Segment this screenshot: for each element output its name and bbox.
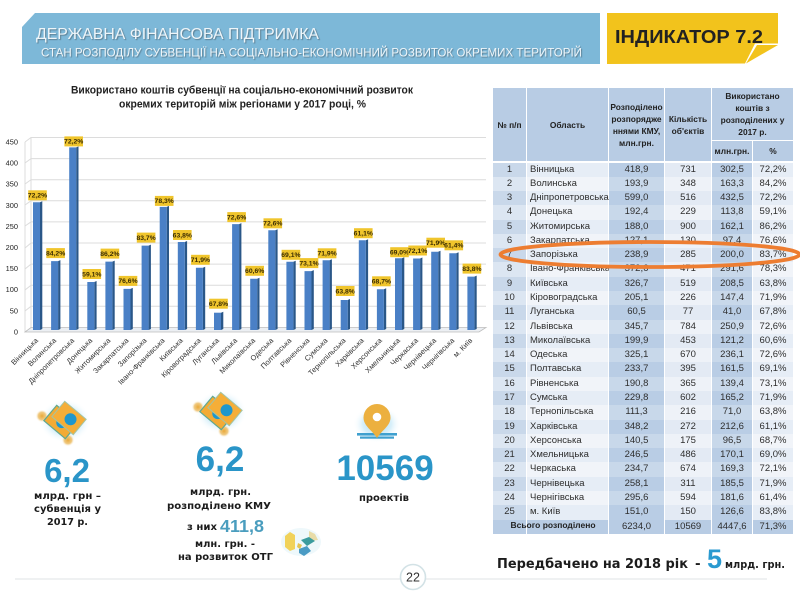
- table rows: 7: [507, 249, 512, 260]
- table rows: 69,1%: [760, 363, 786, 374]
- forecast 2018: млрд. грн.: [725, 559, 785, 571]
- table rows: 418,9: [625, 164, 648, 174]
- table rows: 162,1: [720, 221, 744, 232]
- table rows: 60,5: [627, 306, 646, 317]
- value labels: 72,6%: [263, 221, 282, 228]
- category labels: Одеська: [248, 335, 276, 363]
- table rows: 208,5: [720, 278, 744, 289]
- value labels: 84,2%: [46, 250, 65, 257]
- table rows: Чернівецька: [530, 478, 585, 489]
- chart title: окремих територій між регіонами у 2017 році, %: [119, 98, 366, 110]
- table rows: 72,2%: [760, 192, 786, 203]
- table rows: 24: [504, 492, 515, 503]
- forecast 2018: Передбачено на 2018 рік: [497, 556, 688, 572]
- table rows: 69,0%: [760, 449, 786, 460]
- table rows: 325,1: [625, 349, 648, 360]
- table rows: 311: [680, 478, 696, 489]
- table rows: 67,8%: [760, 306, 786, 317]
- table rows: Львівська: [530, 321, 573, 332]
- table rows: 72,1%: [760, 463, 786, 474]
- table rows: 258,1: [625, 478, 648, 489]
- value labels: 69,1%: [281, 252, 301, 259]
- table rows: 16: [504, 378, 515, 389]
- category labels: Рівненська: [278, 335, 312, 369]
- value labels: 72,1%: [408, 248, 427, 255]
- value labels: 72,6%: [227, 214, 246, 221]
- footer line and page number: 22: [406, 570, 420, 584]
- footer line and page number: [15, 564, 767, 590]
- category labels: Волинська: [26, 335, 59, 368]
- value labels: 71,9%: [191, 257, 210, 264]
- table rows: 345,7: [625, 321, 648, 332]
- table rows: 226: [680, 292, 696, 303]
- category labels: Вінницька: [9, 335, 41, 367]
- stat: 6,2 distributed: млн. грн. -: [195, 539, 255, 550]
- table rows: 3: [507, 192, 512, 203]
- table rows: 516: [680, 192, 696, 203]
- table rows: 291,6: [720, 263, 744, 274]
- category labels: Київська: [158, 335, 185, 363]
- stat: 6,2 subvention: [34, 452, 102, 528]
- table rows: 41,0: [723, 306, 741, 317]
- table rows: 71,3%: [760, 521, 786, 532]
- stat: 6,2 distributed: 6,2: [196, 440, 244, 479]
- table rows: 670: [680, 349, 696, 360]
- table rows: 61,1%: [760, 421, 786, 432]
- value labels: 71,9%: [426, 240, 445, 247]
- table total label: Всього розподілено: [510, 520, 596, 530]
- category labels: Донецька: [65, 335, 95, 366]
- table rows: 17: [504, 392, 515, 403]
- table rows: Кіровоградська: [530, 292, 597, 303]
- table rows: Донецька: [530, 206, 572, 217]
- stat: 6,2 subvention: субвенція у: [34, 504, 102, 515]
- header banner: ДЕРЖАВНА ФІНАНСОВА ПІДТРИМКА: [36, 26, 320, 43]
- table rows: 199,9: [625, 335, 648, 346]
- y axis labels: 300: [6, 201, 18, 210]
- table rows: Хмельницька: [530, 449, 589, 460]
- y axis labels: 400: [6, 158, 18, 168]
- table rows: 77: [683, 306, 693, 317]
- value labels: 73,1%: [299, 260, 319, 267]
- table rows: 250,9: [720, 321, 744, 332]
- stat: 6,2 distributed: розподілено КМУ: [167, 501, 272, 512]
- table rows: 15: [504, 363, 515, 374]
- value labels: 86,2%: [100, 251, 120, 258]
- category labels: Дніпропетровська: [26, 335, 77, 386]
- table rows: 234,7: [625, 463, 648, 474]
- table rows: 185,5: [720, 478, 744, 489]
- stat: 6,2 subvention: млрд. грн –: [34, 491, 101, 502]
- table rows: Одеська: [530, 349, 567, 360]
- table rows: 372,6: [625, 263, 648, 274]
- indicator badge: [607, 13, 778, 64]
- table rows: 163,3: [720, 178, 744, 189]
- y axis labels: 150: [6, 264, 18, 273]
- value labels: 59,1%: [82, 271, 101, 278]
- forecast 2018: 5: [707, 544, 722, 574]
- table rows: 2: [507, 178, 512, 189]
- bars: [33, 146, 477, 330]
- table rows: 200,0: [720, 249, 744, 260]
- table header: Кількість об'єктів: [669, 114, 707, 136]
- table rows: 78,3%: [760, 263, 786, 274]
- value labels: 68,7%: [372, 279, 391, 286]
- table rows: 212,6: [720, 421, 744, 432]
- table rows: 190,8: [625, 378, 648, 389]
- table rows: Луганська: [530, 306, 574, 317]
- category labels: Луганська: [190, 335, 222, 367]
- category labels: Миколаївська: [218, 335, 258, 376]
- table rows: 188,0: [625, 221, 648, 232]
- table rows: 22: [504, 463, 515, 474]
- forecast 2018: -: [695, 556, 701, 572]
- category labels: Львівська: [209, 335, 240, 366]
- table rows: 71,0: [723, 406, 741, 417]
- table rows: 453: [680, 335, 696, 346]
- data table: [493, 88, 793, 534]
- table rows: 59,1%: [760, 206, 786, 217]
- table rows: 602: [680, 392, 696, 403]
- value labels: 72,2%: [28, 193, 47, 200]
- table rows: 8: [507, 263, 512, 274]
- stat: 6,2 distributed: з них: [187, 522, 217, 533]
- table rows: 140,5: [625, 435, 648, 446]
- table rows: 4447,6: [717, 521, 747, 532]
- table rows: 147,4: [720, 292, 744, 303]
- table rows: 76,6%: [760, 235, 786, 246]
- table rows: 326,7: [625, 278, 648, 289]
- table rows: 365: [680, 378, 696, 389]
- table rows: Запорізька: [530, 249, 578, 260]
- value labels: 69,0%: [390, 250, 409, 257]
- table rows: 181,6: [720, 492, 744, 503]
- table rows: 784: [680, 321, 696, 332]
- table rows: 10: [504, 292, 515, 303]
- table rows: Київська: [530, 278, 568, 289]
- table header: %: [769, 146, 777, 156]
- category labels: Херсонська: [349, 335, 384, 371]
- table rows: 96,5: [723, 435, 741, 446]
- table rows: 246,5: [625, 449, 648, 460]
- table rows: 6: [507, 235, 512, 246]
- table rows: 233,7: [625, 363, 648, 374]
- chart title: [71, 84, 413, 110]
- table rows: 23: [504, 478, 515, 489]
- table rows: Вінницька: [530, 164, 574, 174]
- table rows: 13: [504, 335, 515, 346]
- table rows: 126,6: [720, 506, 744, 517]
- table rows: 11: [505, 306, 514, 317]
- table rows: 19: [504, 421, 515, 432]
- stat: projects: проектів: [359, 493, 409, 504]
- value labels: 63,8%: [336, 288, 355, 295]
- table rows: 348,2: [625, 421, 648, 432]
- value labels: 61,4%: [444, 243, 463, 250]
- icon: money 1: [36, 399, 91, 446]
- table rows: 121,2: [720, 335, 744, 346]
- table rows: Чернігівська: [530, 492, 584, 503]
- table rows: 236,1: [720, 349, 744, 360]
- table rows: 238,9: [625, 249, 648, 260]
- table rows: 170,1: [720, 449, 744, 460]
- value labels: 76,6%: [118, 278, 138, 285]
- table rows: 1: [507, 164, 512, 174]
- table rows: [493, 163, 793, 534]
- table rows: 71,9%: [760, 478, 786, 489]
- table rows: 86,2%: [760, 221, 786, 232]
- table rows: 83,8%: [760, 506, 786, 517]
- value labels: [28, 136, 482, 309]
- indicator badge: ІНДИКАТОР 7.2: [615, 26, 763, 47]
- table rows: Тернопільська: [530, 406, 593, 417]
- category labels: Чернівецька: [402, 335, 439, 372]
- table rows: 97,4: [723, 235, 741, 246]
- stat: 6,2 subvention: 2017 р.: [47, 517, 88, 528]
- table rows: 71,9%: [760, 292, 786, 303]
- table rows: 348: [680, 178, 696, 189]
- table rows: 113,8: [720, 206, 744, 217]
- value labels: 67,8%: [209, 301, 228, 308]
- category labels: Харківська: [333, 335, 366, 369]
- table rows: 21: [504, 449, 515, 460]
- stat: 6,2 distributed: 411,8: [220, 516, 264, 536]
- category labels: Чернігівська: [420, 335, 457, 372]
- category labels: [9, 335, 474, 387]
- table rows: 83,7%: [760, 249, 786, 260]
- table rows: Полтавська: [530, 363, 581, 374]
- table rows: 60,6%: [760, 335, 786, 346]
- table rows: Миколаївська: [530, 335, 590, 346]
- category labels: Сумська: [303, 335, 330, 363]
- icon: money 2: [192, 390, 247, 438]
- table rows: 18: [504, 406, 515, 417]
- y axis labels: 350: [6, 180, 18, 189]
- stat: 6,2 distributed: млрд. грн.: [190, 487, 251, 498]
- value labels: 78,3%: [155, 198, 174, 205]
- value labels: 83,8%: [462, 266, 482, 273]
- table rows: Волинська: [530, 178, 577, 189]
- table rows: 229,8: [625, 392, 648, 403]
- table rows: 192,4: [625, 206, 648, 217]
- table rows: 150: [680, 506, 696, 517]
- y axis labels: 0: [14, 328, 18, 336]
- chart title: Використано коштів субвенції на соціально-економічний розвиток: [71, 84, 413, 96]
- table rows: 20: [504, 435, 515, 446]
- y axis labels: [6, 138, 18, 336]
- table rows: Івано-Франківська: [530, 263, 610, 274]
- table rows: Черкаська: [530, 463, 576, 474]
- table rows: 471: [680, 263, 696, 274]
- table rows: 295,6: [625, 492, 648, 503]
- table rows: 72,2%: [760, 164, 786, 174]
- category labels: Івано-Франківська: [116, 335, 167, 387]
- table rows: 395: [680, 363, 696, 374]
- table rows: Житомирська: [530, 221, 590, 232]
- table rows: Сумська: [530, 392, 567, 403]
- table rows: 6234,0: [622, 521, 651, 532]
- table rows: 72,6%: [760, 349, 786, 360]
- category labels: Хмельницька: [363, 335, 403, 375]
- table rows: 519: [680, 278, 696, 289]
- category labels: м. Київ: [451, 336, 474, 359]
- y axis labels: 200: [6, 243, 18, 252]
- table rows: 73,1%: [760, 378, 786, 389]
- value labels: 61,1%: [354, 230, 373, 237]
- category labels: Кіровоградська: [159, 335, 203, 379]
- table rows: 63,8%: [760, 278, 786, 289]
- stat: projects: 10569: [336, 449, 434, 488]
- table rows: 594: [680, 492, 696, 503]
- stat: 6,2 distributed: на розвиток ОТГ: [178, 552, 273, 563]
- table rows: 127,1: [625, 235, 648, 246]
- table rows: Херсонська: [530, 435, 582, 446]
- table rows: Дніпропетровська: [530, 192, 609, 203]
- table rows: 68,7%: [760, 435, 786, 446]
- table header: Розподілено розпорядже ннями КМУ, млн.грн.: [610, 102, 663, 148]
- value labels: 71,9%: [317, 251, 337, 258]
- table header: млн.грн.: [715, 146, 749, 156]
- table rows: 14: [504, 349, 515, 360]
- table rows: 4: [507, 206, 512, 217]
- table rows: 165,2: [720, 392, 744, 403]
- value labels: 72,2%: [64, 139, 83, 146]
- table rows: 731: [680, 164, 696, 174]
- value labels: 60,6%: [245, 268, 264, 275]
- y axis labels: 100: [6, 285, 18, 294]
- table header: Використано коштів з розподілених у 2017 р.: [721, 91, 784, 137]
- table header: [493, 88, 793, 161]
- table rows: Рівненська: [530, 378, 579, 389]
- table rows: Закарпатська: [530, 235, 590, 246]
- table rows: 130: [680, 235, 696, 246]
- table rows: 61,4%: [760, 492, 786, 503]
- table rows: 216: [680, 406, 696, 417]
- category labels: Черкаська: [388, 335, 421, 368]
- category labels: Запорізька: [116, 335, 149, 369]
- table rows: 151,0: [625, 506, 648, 517]
- table rows: 5: [507, 221, 512, 232]
- table rows: 285: [680, 249, 696, 260]
- stat: 6,2 subvention: 6,2: [44, 452, 90, 489]
- table rows: 161,5: [720, 363, 744, 374]
- icon: communities: [281, 528, 321, 556]
- category labels: Полтавська: [259, 335, 294, 371]
- table rows: 302,5: [720, 164, 744, 174]
- header banner: [22, 13, 600, 64]
- table rows: 10569: [675, 521, 701, 532]
- y axis labels: 50: [10, 306, 18, 315]
- table rows: 486: [680, 449, 696, 460]
- table rows: Харківська: [530, 421, 577, 432]
- table rows: 71,9%: [760, 392, 786, 403]
- category labels: Тернопільська: [306, 335, 348, 377]
- bar chart: [6, 136, 486, 387]
- table rows: 193,9: [625, 178, 648, 189]
- table rows: 84,2%: [760, 178, 786, 189]
- table rows: 175: [680, 435, 696, 446]
- table header: Область: [550, 120, 585, 130]
- header banner: СТАН РОЗПОДІЛУ СУБВЕНЦІЇ НА СОЦІАЛЬНО-ЕКОНОМІЧНИЙ РОЗВИТОК ОКРЕМИХ ТЕРИТОРІЙ: [41, 44, 582, 60]
- table rows: 272: [680, 421, 696, 432]
- table rows: 72,6%: [760, 321, 786, 332]
- table rows: 12: [504, 321, 515, 332]
- y axis labels: 250: [6, 222, 18, 231]
- table rows: 169,3: [720, 463, 744, 474]
- table header: № п/п: [497, 120, 522, 130]
- table rows: 205,1: [625, 292, 648, 303]
- y axis labels: 450: [6, 138, 18, 146]
- icon: map pin: [353, 404, 401, 443]
- table rows: 139,4: [720, 378, 744, 389]
- table rows: 25: [504, 506, 515, 517]
- table rows: м. Київ: [530, 506, 560, 517]
- table rows: 599,0: [625, 192, 648, 203]
- table rows: 9: [507, 278, 512, 289]
- table rows: 432,5: [720, 192, 744, 203]
- table rows: 63,8%: [760, 406, 786, 417]
- table rows: 229: [680, 206, 696, 217]
- category labels: Закарпатська: [91, 335, 131, 375]
- stat: 6,2 distributed: [167, 440, 273, 563]
- forecast 2018: [497, 544, 785, 574]
- table rows: 111,3: [625, 406, 648, 417]
- value labels: 63,8%: [173, 232, 192, 239]
- value labels: 83,7%: [136, 235, 156, 242]
- table rows: 900: [680, 221, 696, 232]
- table rows: 674: [680, 463, 696, 474]
- category labels: Житомирська: [73, 335, 113, 375]
